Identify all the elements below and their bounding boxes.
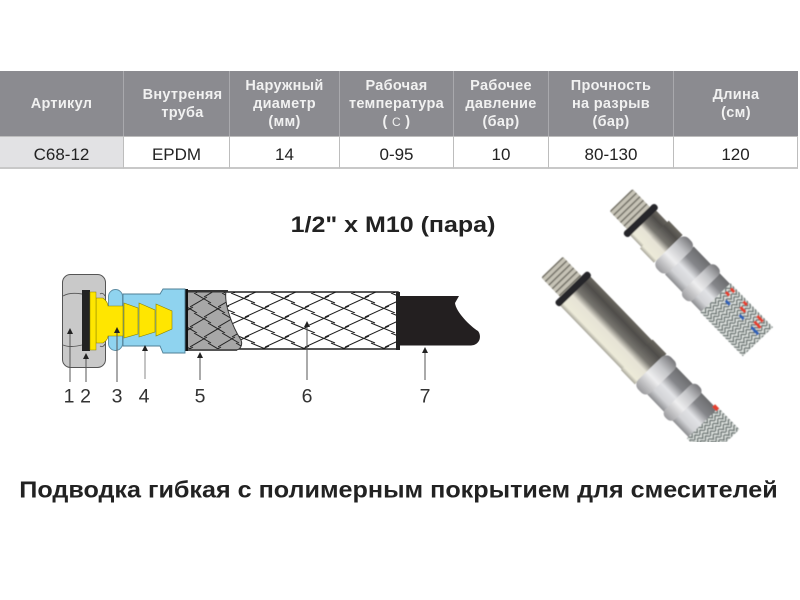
part numbers [64, 386, 430, 408]
cell: pressure value [454, 136, 549, 169]
header: inner tube [124, 71, 230, 136]
header: burst strength: на разрыв [572, 96, 650, 112]
part numbers: 2 [80, 386, 91, 408]
header: length: (см) [721, 104, 751, 120]
header: working pressure: Рабочее [470, 78, 532, 94]
cell: outer diameter value [230, 136, 340, 169]
header: length: Длина [713, 86, 759, 102]
cell: length value [674, 136, 798, 169]
part numbers: 7 [420, 386, 430, 408]
part 7: polymer cover [400, 296, 480, 346]
part 4: blue ferrule [108, 289, 185, 353]
part numbers: 4 [139, 386, 150, 408]
part 2: gasket [82, 290, 96, 351]
part numbers: 3 [112, 386, 122, 408]
specification table [0, 71, 798, 169]
header: working temperature: температура [349, 96, 444, 112]
header: working pressure: (бар) [482, 114, 520, 130]
header: outer diameter: (мм) [268, 114, 301, 130]
part 3: yellow barbed nipple [96, 298, 172, 343]
arrow 2 [83, 353, 89, 382]
cell: temperature value: 0-95 [379, 145, 414, 164]
cell: pressure value: 10 [492, 145, 510, 164]
header: working temperature: Рабочая [365, 78, 428, 94]
part 6: steel braid [225, 292, 400, 350]
arrow 5 [197, 352, 203, 380]
arrow 1 [67, 328, 73, 382]
cell: temperature value [340, 136, 454, 169]
header: working pressure [454, 71, 549, 136]
arrow 7 [422, 347, 428, 380]
product title: Подводка гибкая с полимерным покрытием для смесителей [19, 477, 778, 503]
header: article: Артикул [31, 96, 92, 112]
cell: strength value: 80-130 [585, 145, 637, 164]
cell: length value: 120 [721, 145, 750, 164]
part numbers: 6 [302, 386, 312, 408]
header: burst strength: Прочность [571, 78, 651, 94]
cell: inner tube value [124, 136, 230, 169]
cell: strength value [549, 136, 674, 169]
header: burst strength [549, 71, 674, 136]
part 1: nut [62, 274, 106, 368]
fitting: lower with long body [541, 256, 740, 442]
arrow 6 [304, 321, 310, 380]
arrow 4 [142, 345, 148, 379]
part 5: inner grey tube [185, 289, 242, 351]
header: inner tube: Внутреняя [143, 86, 222, 102]
header: article [0, 71, 124, 136]
part numbers: 1 [64, 386, 74, 408]
fitting: upper with red and blue braid [604, 184, 774, 358]
header: outer diameter: Наружный [245, 78, 324, 94]
cell: article value: C68-12 [34, 145, 89, 164]
header: working temperature [340, 71, 454, 136]
subtitle: connection size: 1/2" x M10 (пара) [291, 212, 495, 238]
photo: pair of fittings [541, 189, 774, 442]
header: working pressure: давление [465, 96, 537, 112]
header: length [674, 71, 798, 136]
part numbers: 5 [195, 386, 206, 408]
cell: inner tube value: EPDM [152, 145, 201, 164]
cross-section diagram of the hose [62, 274, 480, 408]
cell: article value [0, 136, 124, 169]
header: inner tube: труба [161, 104, 204, 120]
header: outer diameter [230, 71, 340, 136]
arrow 3 [114, 327, 120, 382]
cell: outer diameter value: 14 [275, 145, 294, 164]
header: outer diameter: диаметр [253, 96, 316, 112]
header: working temperature: ( C ) [383, 114, 410, 130]
header: burst strength: (бар) [592, 114, 630, 130]
